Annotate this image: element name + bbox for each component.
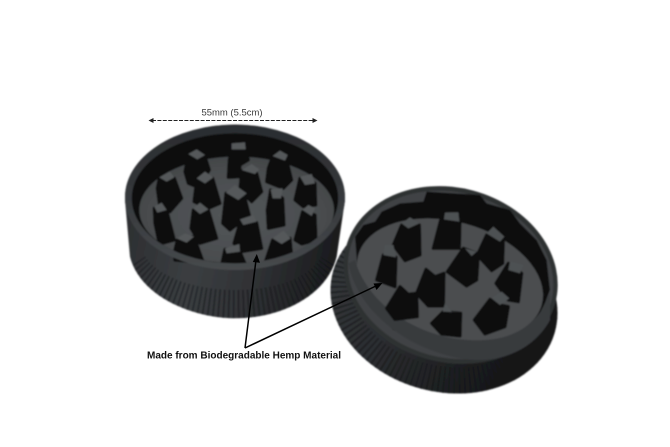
teeth of right grinder — [377, 220, 522, 336]
inner front lip — [348, 260, 550, 360]
inner wall — [132, 132, 338, 265]
teeth of left grinder — [154, 149, 316, 265]
tooth caps of left grinder — [154, 142, 315, 253]
outer rim — [125, 125, 345, 270]
material callout text: Made from Biodegradable Hemp Material — [147, 350, 341, 362]
product photo illustration with annotations — [124, 109, 559, 395]
inner lip — [329, 168, 572, 382]
floor of left grinder — [139, 157, 334, 263]
left grinder half — [125, 125, 345, 318]
rim of right grinder — [323, 163, 578, 387]
dimension arrow — [148, 118, 318, 123]
knurled base of right grinder — [329, 245, 559, 395]
dimension label: 55mm (5.5cm) — [202, 108, 262, 118]
floor of right grinder — [343, 199, 557, 361]
knurled base of left grinder — [125, 200, 345, 318]
tooth caps of right grinder — [383, 212, 523, 312]
inner wall with notches — [355, 192, 550, 345]
callout arrows — [245, 254, 382, 348]
right grinder half — [329, 185, 559, 395]
front rim of left grinder — [125, 125, 345, 270]
